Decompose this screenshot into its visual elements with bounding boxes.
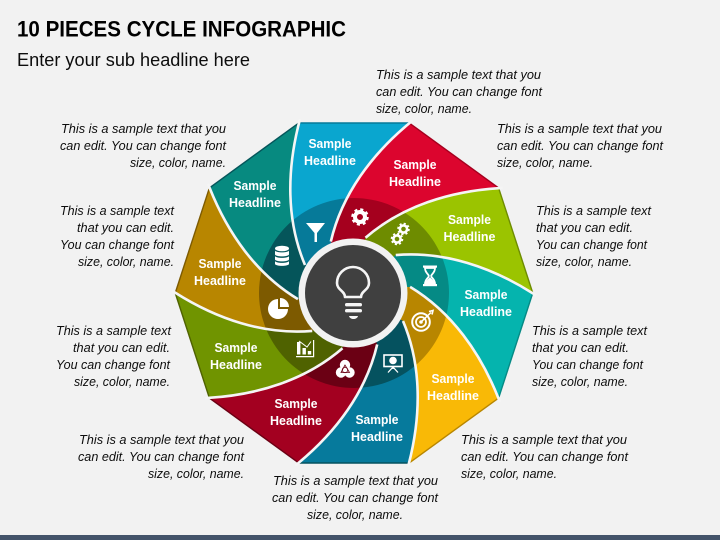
text block: right upper: This is a sample text	[536, 203, 652, 218]
headline: segment 3	[444, 212, 496, 244]
headline: segment 3: Headline	[444, 229, 496, 244]
text block: lower left	[78, 432, 245, 481]
text block: left upper: This is a sample text	[60, 203, 175, 218]
text block: bottom: size, color, name.	[307, 507, 403, 522]
headline: segment 3: Sample	[448, 212, 491, 227]
headline: segment 1: Sample	[308, 136, 352, 151]
headline: segment 10: Headline	[229, 195, 281, 210]
headline: segment 1	[304, 136, 356, 168]
headline: segment 10	[229, 178, 281, 210]
headline: segment 6: Sample	[356, 412, 398, 427]
text block: left upper: that you can edit.	[77, 220, 174, 235]
segment 4: teal	[394, 255, 533, 398]
headline: segment 6: Headline	[351, 429, 403, 444]
text block: left lower: This is a sample text	[56, 323, 172, 338]
segment 9: gold	[175, 188, 314, 331]
text block: top: This is a sample text that you	[376, 67, 541, 82]
headline: segment 7: Sample	[274, 396, 318, 411]
headline: segment 2	[389, 157, 441, 189]
icon: bar chart	[296, 340, 314, 357]
text block: lower right	[461, 432, 629, 481]
central hub	[298, 238, 408, 348]
headline: segment 10: Sample	[234, 178, 276, 193]
headline: segment 6	[351, 412, 403, 444]
headline: segment 5: Sample	[432, 371, 474, 386]
text block: right lower: This is a sample text	[532, 323, 648, 338]
headline: segment 2: Sample	[394, 157, 436, 172]
text block: right lower: size, color, name.	[532, 374, 628, 389]
headline: segment 8	[210, 340, 262, 372]
text block: left lower: You can change font	[56, 357, 171, 372]
text block: left upper: You can change font	[60, 237, 175, 252]
segment 1: blue	[292, 122, 409, 266]
headline: segment 4: Sample	[464, 287, 508, 302]
text block: left lower: that you can edit.	[73, 340, 170, 355]
text block: lower right: can edit. You can change font	[461, 449, 629, 464]
text block: bottom	[272, 473, 439, 522]
text block: right lower: that you can edit.	[532, 340, 629, 355]
text block: bottom: This is a sample text that you	[273, 473, 438, 488]
headline: segment 9: Sample	[198, 256, 242, 271]
text block: left upper: size, color, name.	[78, 254, 174, 269]
text block: upper right: This is a sample text that you	[497, 121, 662, 136]
segment 7: crimson	[210, 342, 378, 462]
segment 3: green	[365, 189, 534, 292]
subtitle: Enter your sub headline here	[17, 50, 250, 70]
text block: upper left: can edit. You can change font	[60, 138, 227, 153]
text block: right upper	[536, 203, 652, 269]
text block: top: size, color, name.	[376, 101, 472, 116]
headline: segment 4	[460, 287, 512, 319]
text block: left lower	[56, 323, 172, 389]
text block: upper left: This is a sample text that you	[61, 121, 226, 136]
text block: upper left	[60, 121, 227, 170]
text block: right lower	[532, 323, 648, 389]
headline: segment 9: Headline	[194, 273, 246, 288]
headline: segment 1: Headline	[304, 153, 356, 168]
segment 8: olive	[174, 294, 343, 397]
text block: left upper	[60, 203, 175, 269]
text block: left lower: size, color, name.	[74, 374, 170, 389]
segment 10: sea green	[210, 122, 306, 300]
text block: lower right: This is a sample text that you	[461, 432, 627, 447]
headline: segment 9	[194, 256, 246, 288]
footer bar	[0, 535, 720, 540]
text block: upper right: size, color, name.	[497, 155, 593, 170]
icon: pie chart	[268, 298, 289, 319]
text block: right lower: You can change font	[532, 357, 644, 372]
icon: light bulb	[337, 267, 369, 319]
icon: presentation board	[384, 355, 402, 372]
headline: segment 7: Headline	[270, 413, 322, 428]
title: 10 PIECES CYCLE INFOGRAPHIC	[17, 16, 346, 42]
text block: upper right: can edit. You can change font	[497, 138, 664, 153]
text block: right upper: You can change font	[536, 237, 648, 252]
text block: right upper: size, color, name.	[536, 254, 632, 269]
text block: lower left: size, color, name.	[148, 466, 244, 481]
icon: venn circles	[336, 360, 355, 378]
text block: top: can edit. You can change font	[376, 84, 543, 99]
segment 2: red	[330, 124, 498, 243]
text block: lower left: can edit. You can change font	[78, 449, 245, 464]
icon: database	[275, 246, 289, 266]
headline: segment 5	[427, 371, 479, 403]
text block: right upper: that you can edit.	[536, 220, 633, 235]
text block: lower left: This is a sample text that you	[79, 432, 244, 447]
headline: segment 8: Sample	[214, 340, 258, 355]
text block: upper right	[497, 121, 664, 170]
icon: target	[412, 310, 433, 331]
text block: top	[376, 67, 543, 116]
text block: lower right: size, color, name.	[461, 466, 557, 481]
headline: segment 2: Headline	[389, 174, 441, 189]
text block: upper left: size, color, name.	[130, 155, 226, 170]
headline: segment 8: Headline	[210, 357, 262, 372]
segment 5: yellow	[400, 286, 498, 464]
icon: hourglass	[423, 266, 437, 286]
text block: bottom: can edit. You can change font	[272, 490, 439, 505]
cycle diagram	[174, 122, 534, 464]
icon: funnel	[306, 223, 325, 242]
icon: gear	[352, 210, 368, 224]
icon: gears	[392, 224, 409, 244]
headline: segment 4: Headline	[460, 304, 512, 319]
segment 6: dark blue	[299, 320, 416, 464]
headline: segment 5: Headline	[427, 388, 479, 403]
headline: segment 7	[270, 396, 322, 428]
